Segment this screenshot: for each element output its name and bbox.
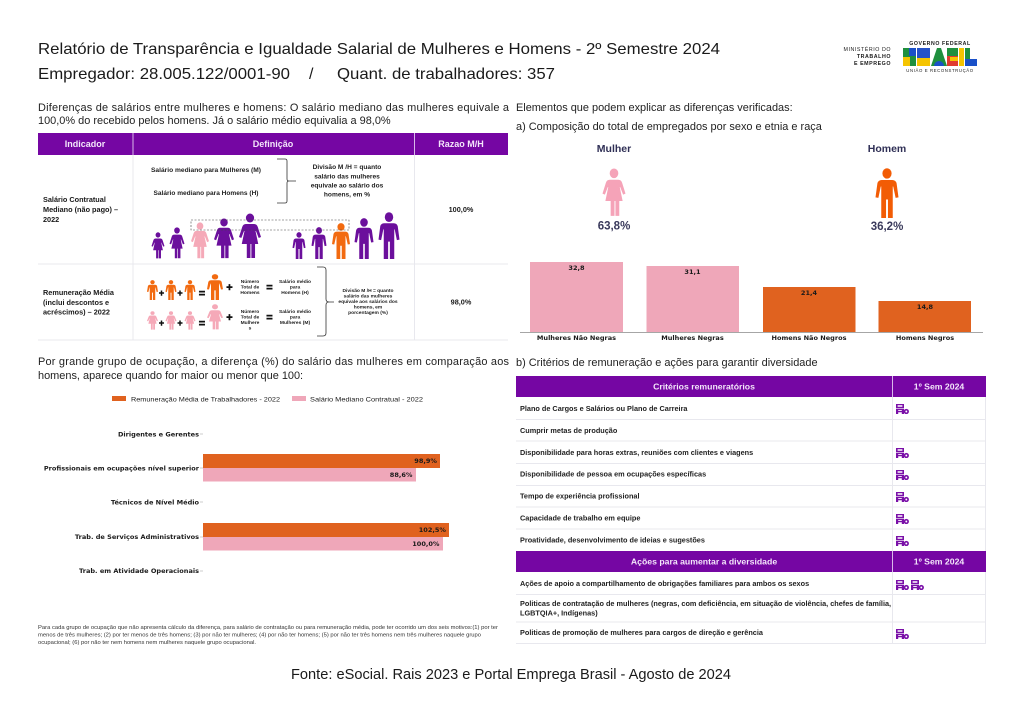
- bar chart: composition: [520, 262, 983, 342]
- bars: profissionais: [203, 454, 440, 482]
- criteria rows: Disponibilidade para horas extras, reuniões com clientes e viagens: [520, 448, 753, 457]
- row label: salário contratual: Mediano (não pago) –: [43, 205, 118, 214]
- chart legend: Remuneração Média de Trabalhadores - 2022: [131, 396, 280, 404]
- definition: median salary text: [151, 159, 384, 203]
- definition: median salary text: Salário mediano para Homens (H): [154, 190, 258, 197]
- intro paragraph: 100,0% do recebido pelos homens. Já o salário médio equivalia a 98,0%: [38, 115, 391, 127]
- table header: Definição: [253, 139, 294, 149]
- bar chart: occupational groups: Trab. de Serviços Administrativos: [75, 533, 199, 541]
- logo: ministério do trabalho e emprego: TRABALHO: [857, 54, 891, 60]
- chart legend: [112, 396, 423, 404]
- footnote: ocupacional; (6) por não ter nem homens nem mulheres naquele grupo ocupacional.: [38, 640, 256, 646]
- equation: average pay women: +: [159, 318, 164, 328]
- equation: average pay women: Mulheres (M): [280, 320, 310, 326]
- source: Fonte: eSocial. Rais 2023 e Portal Emprega Brasil - Agosto de 2024: [291, 667, 731, 683]
- panel: indicator table: [38, 133, 508, 340]
- panel: women share: Mulher: [597, 143, 631, 155]
- heading: occupational groups: [38, 356, 510, 382]
- row label: salário contratual: Salário Contratual: [43, 195, 106, 204]
- panel: men share: 36,2%: [871, 221, 903, 233]
- title: Relatório de Transparência e Igualdade Salarial de Mulheres e Homens - 2º Semestre 2024: [38, 41, 720, 58]
- bars: serviços administrativos: 102,5%: [419, 526, 446, 534]
- equation: average pay women: s: [249, 326, 252, 332]
- bar chart: occupational groups: Trab. em Atividade Operacionais: [79, 567, 199, 575]
- bracket and division note: [317, 267, 398, 336]
- equation: average pay men: [147, 274, 311, 300]
- header: ações: 1º Sem 2024: [914, 556, 964, 566]
- panel: women share: [597, 143, 631, 232]
- bar chart: composition: 32,8: [568, 264, 585, 272]
- panel: men share: [868, 143, 906, 233]
- row label: remuneração média: (inclui descontos e: [43, 298, 109, 307]
- row label: remuneração média: acréscimos) – 2022: [43, 308, 110, 316]
- table header: Indicador: [65, 139, 106, 149]
- logo: governo federal brasil: UNIÃO E RECONSTRUÇÃO: [906, 68, 974, 73]
- header: critérios: Critérios remuneratórios: [653, 382, 755, 392]
- bracket and division note: salário das mulheres: [344, 294, 393, 300]
- heading: occupational groups: Por grande grupo de ocupação, a diferença (%) do salário das mulheres em comparação aos: [38, 356, 510, 368]
- figures: median line-up of men: [191, 212, 400, 259]
- bar chart: composition: Homens Negros: [896, 334, 954, 342]
- row label: remuneração média: [43, 288, 115, 316]
- header: ações: Ações para aumentar a diversidade: [631, 556, 777, 566]
- equation: average pay men: Homens: [240, 290, 260, 296]
- logo: ministério do trabalho e emprego: [844, 46, 891, 67]
- action rows: Politicas de promoção de mulheres para cargos de direção e gerência: [520, 628, 764, 637]
- logo: governo federal brasil: [903, 41, 977, 73]
- intro paragraph: Diferenças de salários entre mulheres e homens: O salário mediano das mulheres equivale a: [38, 102, 510, 114]
- criteria rows: Cumprir metas de produção: [520, 426, 618, 435]
- bar chart: occupational groups: Dirigentes e Gerentes: [118, 430, 199, 438]
- action rows: LGBTQIA+, Indígenas): [520, 608, 598, 618]
- intro paragraph: [38, 102, 510, 127]
- bar chart: composition: 14,8: [917, 303, 934, 311]
- equation: average pay men: Homens (H): [281, 290, 309, 296]
- bracket and division note: homens, em: [354, 304, 383, 310]
- definition: median salary text: homens, em %: [324, 192, 370, 198]
- bars: serviços administrativos: [203, 523, 449, 550]
- equation: average pay men: +: [177, 288, 183, 298]
- bars: serviços administrativos: 100,0%: [412, 540, 440, 548]
- bar chart: occupational groups: Profissionais em ocupações nível superior: [44, 464, 200, 472]
- equation: average pay women: =: [199, 318, 205, 330]
- equation: average pay men: +: [159, 288, 164, 298]
- bracket and division note: equivale aos salários dos: [338, 299, 398, 305]
- definition: median salary text: Divisão M /H = quanto: [313, 164, 381, 171]
- bar chart: occupational groups: Técnicos de Nível Médio: [111, 498, 199, 506]
- footnote: menos de três mulheres; (2) por ter menos de três homens; (3) por não ter mulheres; (4) por não ter homens; (5) por não ter três homens nem três mulheres naquele grupo: [38, 632, 481, 638]
- equation: average pay men: =: [199, 288, 205, 300]
- heading: occupational groups: homens, aparece quando for maior ou menor que 100:: [38, 370, 303, 382]
- row label: salário contratual: 2022: [43, 215, 59, 224]
- logo: ministério do trabalho e emprego: MINISTÉRIO DO: [844, 46, 891, 53]
- equation: average pay women: =: [266, 312, 273, 324]
- heading: composition: a) Composição do total de empregados por sexo e etnia e raça: [516, 121, 823, 133]
- table header: [38, 133, 508, 155]
- action icons: [896, 580, 923, 639]
- employer line: /: [309, 66, 314, 83]
- panel: criteria table: [516, 376, 986, 644]
- equation: average pay women: Mulhere: [241, 320, 260, 326]
- employer line: Quant. de trabalhadores: 357: [337, 66, 555, 83]
- bars: profissionais: 98,9%: [414, 457, 437, 465]
- bracket and division note: Divisão M /H = quanto: [343, 288, 393, 294]
- definition: median salary text: salário das mulheres: [314, 174, 380, 180]
- chart legend: Salário Mediano Contratual - 2022: [310, 396, 423, 404]
- footnote: [38, 625, 498, 646]
- action rows: Ações de apoio a compartilhamento de obrigações familiares para ambos os sexos: [520, 579, 809, 588]
- panel: women share: 63,8%: [598, 220, 630, 232]
- criteria rows: Proatividade, desenvolvimento de ideias e sugestões: [520, 536, 705, 544]
- heading: explanatory elements: Elementos que podem explicar as diferenças verificadas:: [516, 102, 793, 114]
- header: critérios: [516, 376, 986, 397]
- bars: profissionais: 88,6%: [390, 471, 413, 479]
- employer line: Empregador: 28.005.122/0001-90: [38, 66, 290, 83]
- equation: average pay men: Total de: [241, 284, 259, 290]
- ratio values: 100,0%: [449, 205, 474, 214]
- logo: ministério do trabalho e emprego: E EMPREGO: [854, 61, 891, 67]
- equation: average pay men: +: [226, 282, 233, 294]
- criteria icons: [896, 404, 908, 546]
- criteria rows: [520, 404, 753, 544]
- equation: average pay men: Salário médio: [279, 279, 311, 285]
- logo: governo federal brasil: GOVERNO FEDERAL: [909, 41, 971, 47]
- equation: average pay men: =: [266, 282, 273, 294]
- equation: average pay women: para: [290, 314, 300, 320]
- heading: criteria: b) Critérios de remuneração e ações para garantir diversidade: [516, 357, 818, 369]
- equation: average pay men: Número: [241, 279, 259, 285]
- bar chart: composition: 21,4: [801, 289, 818, 297]
- equation: average pay women: Salário médio: [279, 309, 311, 315]
- equation: average pay women: +: [226, 312, 233, 324]
- figures: median line-up of women: [152, 214, 261, 258]
- footnote: Para cada grupo de ocupação que não apresenta cálculo da diferença, para salário de contratação ou para remuneração média, pode ter ocorrido um dos seis motivos:(1) por ter: [38, 625, 498, 631]
- bar chart: composition: Mulheres Negras: [661, 334, 724, 342]
- ratio values: 98,0%: [451, 298, 472, 306]
- header: ações: [516, 551, 986, 572]
- equation: average pay women: +: [177, 318, 183, 328]
- definition: median salary text: Salário mediano para Mulheres (M): [151, 167, 261, 174]
- header: critérios: 1º Sem 2024: [914, 382, 964, 392]
- employer line: [38, 66, 555, 83]
- row label: remuneração média: Remuneração Média: [43, 288, 115, 297]
- criteria rows: Tempo de experiência profissional: [520, 492, 640, 500]
- criteria rows: Disponibilidade de pessoa em ocupações específicas: [520, 470, 706, 478]
- equation: average pay women: Número: [241, 309, 259, 315]
- bar chart: composition: Mulheres Não Negras: [537, 334, 616, 342]
- row label: salário contratual: [43, 195, 118, 224]
- equation: average pay women: [147, 304, 311, 332]
- definition: median salary text: equivale ao salário dos: [311, 182, 384, 190]
- bracket and division note: porcentagem (%): [348, 310, 388, 316]
- bar chart: composition: Homens Não Negros: [772, 334, 847, 342]
- equation: average pay men: para: [290, 284, 300, 290]
- table header: Razao M/H: [438, 139, 484, 149]
- action rows: [520, 579, 891, 637]
- bar chart: composition: 31,1: [684, 268, 701, 276]
- bar chart: occupational groups: [44, 430, 449, 575]
- ratio values: [449, 205, 474, 306]
- panel: men share: Homem: [868, 143, 906, 155]
- criteria rows: Capacidade de trabalho em equipe: [520, 514, 640, 522]
- criteria rows: Plano de Cargos e Salários ou Plano de Carreira: [520, 404, 688, 413]
- action rows: Politicas de contratação de mulheres (negras, com deficiência, em situação de violência, chefes de família,: [520, 599, 891, 608]
- equation: average pay women: Total de: [241, 314, 259, 320]
